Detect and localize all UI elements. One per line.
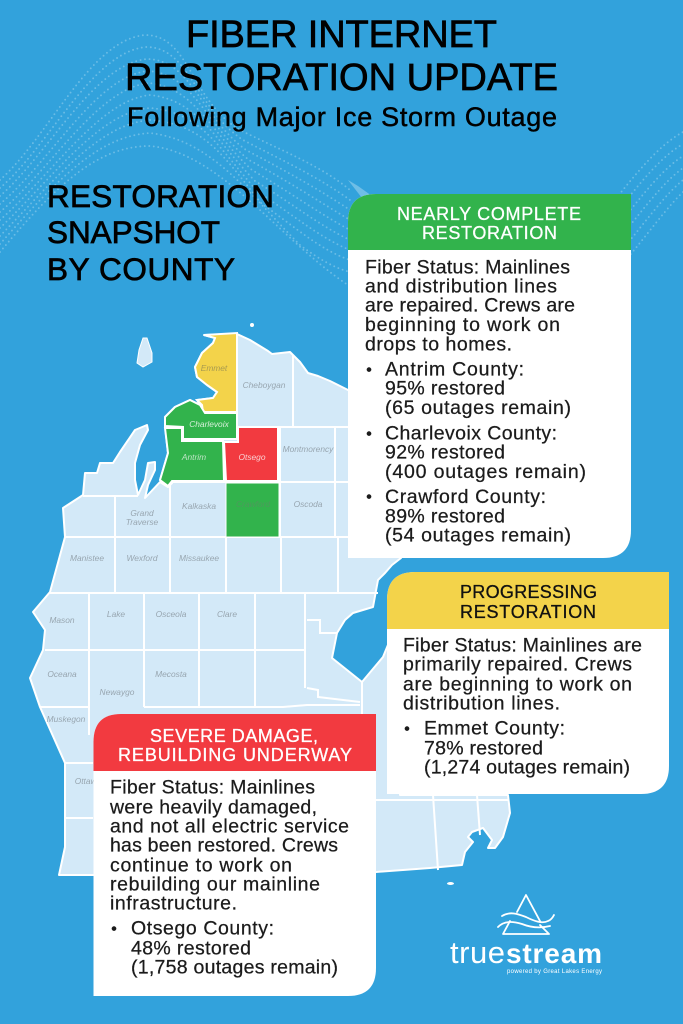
county labels: Missaukee [179, 553, 219, 563]
county: Otsego [224, 427, 278, 481]
title: RESTORATION UPDATE [125, 57, 558, 99]
Beaver Island [137, 338, 152, 367]
county list: Emmet County: [424, 718, 565, 740]
county labels: Mason [49, 615, 75, 625]
title: FIBER INTERNET [186, 14, 497, 56]
county labels: Wexford [126, 553, 158, 563]
wordmark: true [450, 935, 505, 970]
county labels: Manistee [70, 553, 104, 563]
county list: Otsego County: [131, 918, 274, 940]
county labels: Muskegon [47, 714, 86, 724]
panel header: green [348, 194, 631, 250]
county list: 95% restored [385, 378, 505, 400]
section heading: RESTORATION [47, 178, 274, 214]
county list: (65 outages remain) [385, 397, 571, 419]
county: Antrim [160, 428, 224, 486]
fiber status text [109, 777, 349, 915]
county labels: Mecosta [155, 669, 187, 679]
county labels: Clare [217, 609, 237, 619]
panel header: red: REBUILDING UNDERWAY [118, 745, 352, 765]
county list: Charlevoix County: [385, 423, 557, 445]
fiber status text: Fiber Status: Mainlines [365, 257, 570, 279]
panel header: green: NEARLY COMPLETE [397, 204, 581, 224]
county labels: Otsego [238, 452, 266, 462]
county labels: Grand [130, 508, 154, 518]
county map [30, 323, 510, 885]
fiber status text: Fiber Status: Mainlines [110, 777, 315, 799]
county list: (1,274 outages remain) [424, 757, 630, 779]
fiber status text: continue to work on [110, 855, 292, 877]
county list: 89% restored [385, 506, 505, 528]
fiber status text: drops to homes. [365, 334, 512, 356]
fiber status text: are beginning to work on [403, 674, 632, 696]
county labels: Ottawa [75, 776, 102, 786]
fiber status text: and distribution lines [365, 276, 557, 298]
fiber status text: Fiber Status: Mainlines are [403, 635, 642, 657]
county list: 78% restored [424, 738, 543, 760]
fiber status text: and not all electric service [110, 816, 349, 838]
county: Charlevoix [165, 400, 237, 439]
county list: Crawford County: [385, 486, 546, 508]
land outline [30, 334, 510, 875]
county labels: Oceana [47, 669, 77, 679]
title: Following Major Ice Storm Outage [127, 102, 557, 132]
title [125, 14, 558, 132]
fiber status text [403, 635, 642, 715]
county labels: Emmet [201, 363, 228, 373]
panel header: green: RESTORATION [422, 223, 557, 243]
county labels [47, 363, 334, 786]
county list [112, 918, 338, 979]
county labels: Kalkaska [182, 501, 216, 511]
fiber status text: rebuilding our mainline [110, 874, 320, 896]
fiber status text: were heavily damaged, [109, 797, 317, 819]
panel: severe damage [94, 714, 376, 996]
fiber status text: infrastructure. [110, 893, 237, 915]
tagline: powered by Great Lakes Energy [507, 969, 602, 975]
county labels: Lake [107, 609, 125, 619]
fiber status text: beginning to work on [365, 314, 560, 336]
panel header: yellow: RESTORATION [460, 602, 596, 622]
county list [367, 359, 586, 547]
fiber status text: distribution lines. [403, 693, 560, 715]
county labels: Charlevoix [189, 419, 230, 429]
section heading: BY COUNTY [47, 251, 235, 287]
fiber status text [365, 257, 575, 356]
county: Emmet [195, 333, 237, 412]
county labels: Antrim [181, 452, 206, 462]
fiber status text: are repaired. Crews are [365, 295, 575, 317]
panel header: red: SEVERE DAMAGE, [150, 726, 318, 746]
panel: progressing restoration [387, 572, 669, 794]
county list: 48% restored [131, 938, 251, 960]
fiber status text: has been restored. Crews [110, 835, 338, 857]
county list: 92% restored [385, 442, 505, 464]
panel: nearly complete restoration [348, 194, 631, 558]
fiber status text: primarily repaired. Crews [403, 654, 632, 676]
section heading: SNAPSHOT [47, 214, 220, 250]
panel header: yellow [387, 572, 669, 629]
county list: Antrim County: [385, 359, 524, 381]
county labels: Osceola [156, 609, 187, 619]
icon: triangle and waves [498, 895, 554, 934]
county list: (54 outages remain) [385, 525, 571, 547]
logo: truestream [450, 895, 602, 975]
county list: (400 outages remain) [385, 461, 586, 483]
panel header: yellow: PROGRESSING [460, 582, 597, 602]
panel header: red [94, 714, 376, 771]
county grid [40, 355, 509, 870]
county labels: Montmorency [283, 444, 334, 454]
county labels: Crawford [236, 499, 270, 509]
county list [405, 718, 630, 779]
county: Crawford [226, 483, 279, 537]
county labels: Newaygo [100, 687, 135, 697]
county labels: Cheboygan [243, 380, 286, 390]
county labels: Oscoda [294, 499, 323, 509]
section heading [47, 178, 274, 287]
county labels: Traverse [126, 517, 159, 527]
county list: (1,758 outages remain) [131, 957, 338, 979]
logo: truestream: stream [506, 938, 602, 969]
